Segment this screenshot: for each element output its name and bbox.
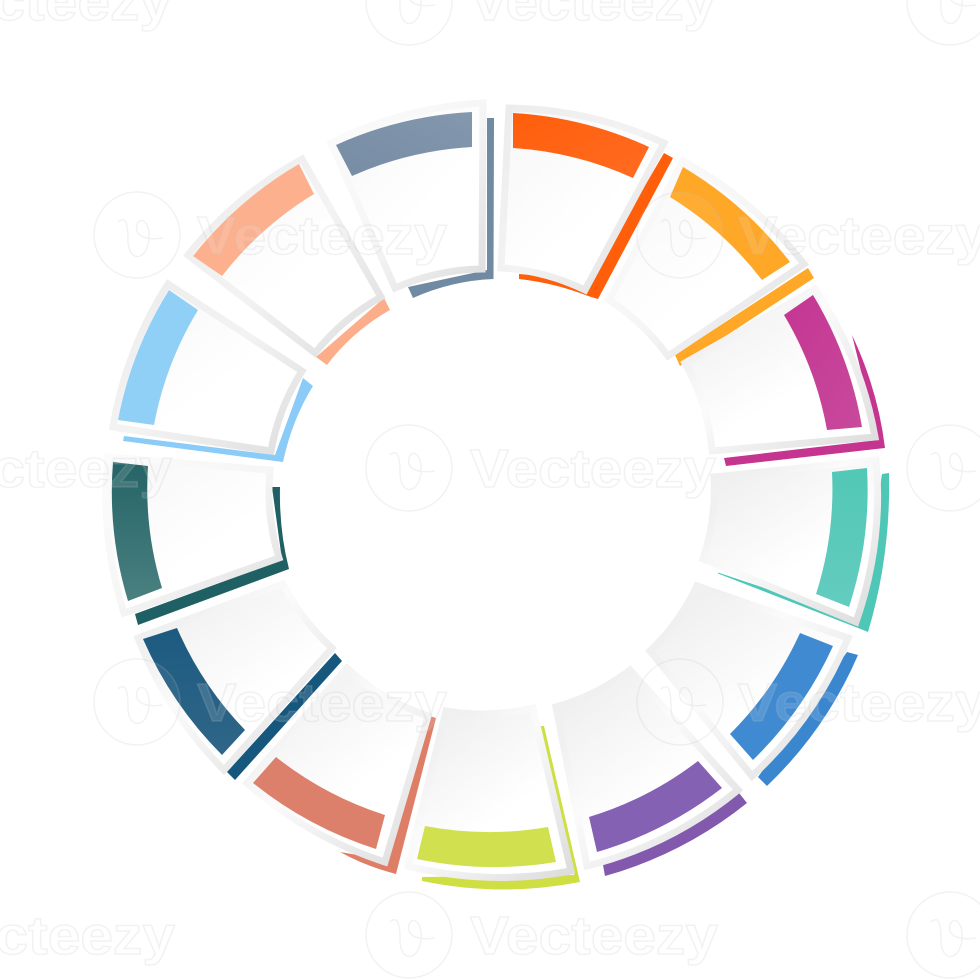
accent: orange xyxy=(519,153,673,299)
band: orange xyxy=(513,113,649,178)
accent: salmon xyxy=(340,715,436,874)
watermark: Vecteezy xyxy=(738,673,980,733)
accent: teal xyxy=(718,473,889,632)
card: slate xyxy=(331,103,483,288)
accent: peach xyxy=(316,298,390,365)
accent: lime xyxy=(422,726,580,889)
band: magenta xyxy=(784,295,862,430)
card: blue xyxy=(650,586,848,776)
watermark: Vecteezy xyxy=(738,206,980,266)
card: lime xyxy=(408,708,571,877)
accent: magenta xyxy=(724,335,885,466)
band: salmon xyxy=(253,757,385,849)
accent: light blue xyxy=(123,378,313,462)
accent: blue xyxy=(758,652,858,786)
band: teal xyxy=(816,468,868,607)
band: lime xyxy=(417,826,556,867)
segment: amber xyxy=(609,161,814,366)
segment: slate xyxy=(331,103,494,298)
segment: dark teal xyxy=(106,457,289,625)
band: dark teal xyxy=(112,462,162,601)
segment: salmon xyxy=(247,668,436,874)
band: peach xyxy=(193,164,314,276)
band: navy xyxy=(143,628,245,755)
card: navy xyxy=(138,584,332,770)
card: magenta xyxy=(685,289,875,451)
card: orange xyxy=(501,108,664,290)
card: teal xyxy=(703,460,878,622)
band: purple xyxy=(589,761,722,852)
accent: dark teal xyxy=(135,487,289,625)
segment: lime xyxy=(408,708,580,889)
segment: navy xyxy=(138,584,342,780)
segment: peach xyxy=(188,159,390,365)
watermark: Vecteezy xyxy=(197,206,447,266)
accent: slate xyxy=(408,118,494,298)
watermark: Vecteezy xyxy=(470,906,718,966)
watermark: Vecteezy xyxy=(470,439,716,499)
band: amber xyxy=(670,167,790,280)
band: blue xyxy=(730,633,833,760)
accent: navy xyxy=(227,653,342,780)
segment: magenta xyxy=(685,289,885,466)
card: purple xyxy=(556,670,738,866)
watermark: Vecteezy xyxy=(197,673,447,733)
segment: light blue xyxy=(113,284,313,462)
segment: teal xyxy=(703,460,889,632)
segment: blue xyxy=(650,586,858,786)
segment: purple xyxy=(556,670,747,876)
card: peach xyxy=(188,159,381,353)
card: salmon xyxy=(247,668,428,862)
card: light blue xyxy=(113,284,302,451)
segment: orange xyxy=(501,108,673,299)
band: light blue xyxy=(118,290,198,425)
card: amber xyxy=(609,161,804,356)
accent: purple xyxy=(603,793,747,876)
band: slate xyxy=(336,112,472,176)
accent: amber xyxy=(675,268,814,366)
card: dark teal xyxy=(106,457,279,613)
